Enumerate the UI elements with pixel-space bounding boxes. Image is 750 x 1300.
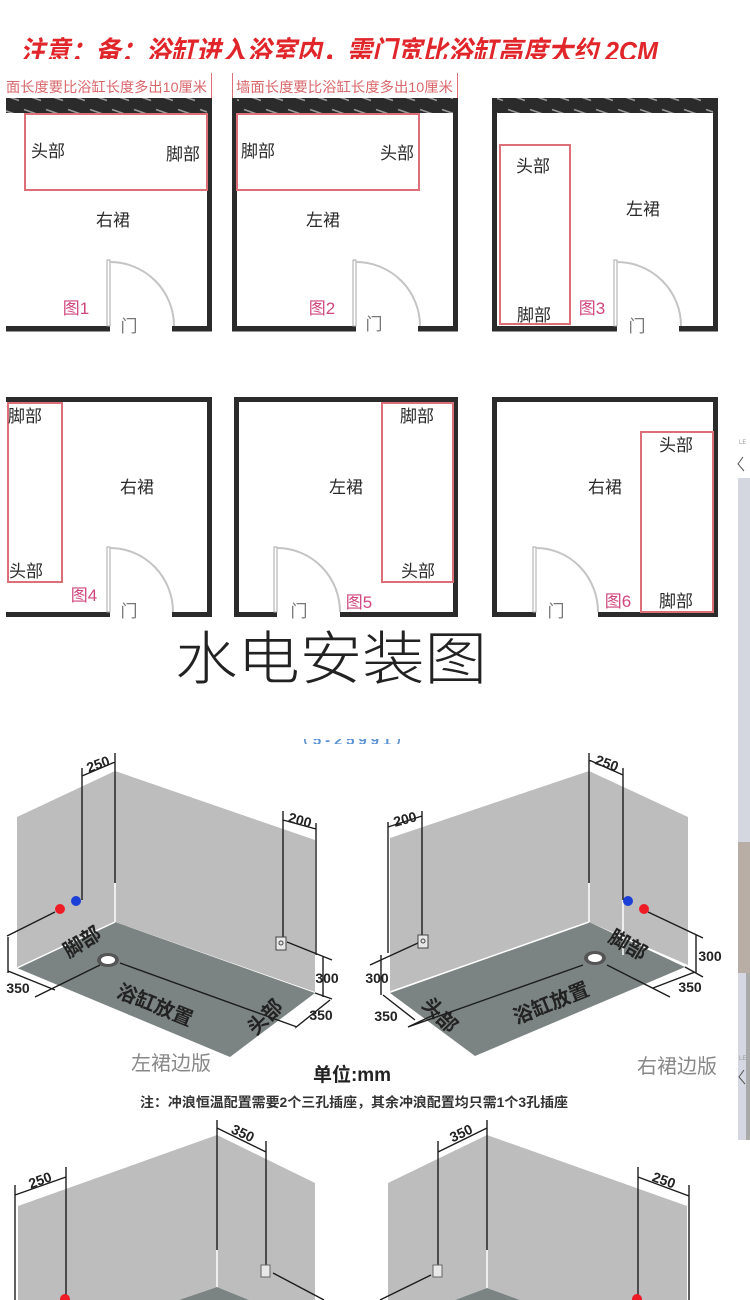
dimension lines — [380, 1120, 689, 1300]
floor plan 2: 头部 — [380, 144, 414, 163]
socket — [276, 937, 286, 950]
installation note: 注：冲浪恒温配置需要2个三孔插座，其余冲浪配置均只需1个3孔插座 — [140, 1094, 569, 1110]
floor labels: 脚部 — [59, 922, 105, 963]
floor plan 1: 右裙 — [96, 211, 130, 230]
floor plan 1: 门 — [120, 317, 138, 336]
floor — [179, 1287, 249, 1300]
neighbouring image strip at right edge — [738, 440, 750, 1140]
floor plan 2: 脚部 — [241, 142, 275, 161]
neighbouring image strip at right edge: LE — [739, 440, 746, 446]
wall length note: 墙面长度要比浴缸长度多出10厘米 — [236, 79, 453, 95]
dimension values: 250 — [84, 752, 112, 776]
diagram: left skirt version: 350 — [6, 980, 30, 996]
diagram: lower left: 250 — [26, 1168, 54, 1192]
diagram: lower right — [380, 1120, 689, 1300]
floor plan 1 — [6, 73, 212, 336]
floor plan 5: 门 — [290, 602, 308, 621]
socket — [433, 1265, 442, 1277]
section heading: 水电安装图 — [175, 627, 487, 692]
floor plan 5: 脚部 — [400, 407, 434, 426]
diagram: right skirt version: 浴缸放置 — [509, 977, 593, 1029]
diagram: right skirt version: 300 — [365, 970, 389, 986]
diagram: left skirt version: 浴缸放置 — [113, 979, 197, 1031]
drain — [97, 953, 119, 967]
floor plan 3: 头部 — [516, 157, 550, 176]
floor plan 6: 门 — [548, 602, 564, 621]
socket — [418, 935, 428, 948]
walls — [388, 1135, 487, 1300]
clipped blue caption remnant: （5-25991） — [294, 732, 410, 749]
drain — [584, 951, 606, 965]
floor plan 4 — [6, 397, 212, 621]
diagram: right skirt version: 300 — [698, 948, 722, 964]
version label: 右裙边版 — [637, 1055, 717, 1078]
hot water point — [632, 1294, 642, 1300]
walls — [390, 771, 589, 992]
diagram: left skirt version: 200 — [287, 809, 314, 831]
dimension values: 250 — [593, 751, 621, 775]
dimension values: 350 — [447, 1121, 475, 1145]
floor — [17, 922, 315, 1057]
dimension lines — [370, 753, 703, 1027]
dimension lines — [15, 1120, 324, 1300]
diagram: lower left — [15, 1120, 324, 1300]
neighbouring image strip at right edge: LE — [739, 1056, 746, 1062]
floor plan 5: 头部 — [401, 562, 435, 581]
diagram: left skirt version: 350 — [309, 1007, 333, 1023]
diagram: left skirt version: 300 — [315, 970, 339, 986]
floor plan 1: 图1 — [63, 299, 89, 318]
diagram: left skirt version — [6, 752, 339, 1075]
floor plan 4: 右裙 — [120, 478, 154, 497]
floor — [390, 922, 685, 1056]
floor plan 5: 图5 — [346, 593, 372, 612]
floor plan 4: 图4 — [71, 586, 97, 605]
floor plan 2: 图2 — [309, 299, 335, 318]
floor plan 2 — [232, 73, 458, 334]
floor plan 2: 左裙 — [306, 211, 340, 230]
floor plan 3 — [492, 98, 718, 336]
dimension values: 350 — [229, 1121, 257, 1145]
version label: 左裙边版 — [131, 1052, 211, 1075]
floor plan 1: 脚部 — [166, 145, 200, 164]
floor — [455, 1288, 520, 1300]
floor plan 4: 头部 — [9, 562, 43, 581]
floor plan 6: 头部 — [659, 436, 693, 455]
diagram: right skirt version: 350 — [678, 979, 702, 995]
hot and cold water points — [55, 904, 65, 914]
hot water point — [60, 1294, 70, 1300]
diagram: right skirt version: 头部 — [417, 993, 462, 1038]
notice title: 注意：备：浴缸进入浴室内，需门宽比浴缸高度大约 2CM — [20, 36, 659, 67]
floor plan 2: 门 — [366, 315, 382, 334]
dimension lines — [7, 753, 332, 1028]
diagram: left skirt version: 头部 — [243, 995, 288, 1040]
floor plan 6: 脚部 — [659, 592, 693, 611]
unit label: 单位:mm — [313, 1063, 391, 1086]
socket — [261, 1265, 270, 1277]
floor plan 1: 头部 — [31, 142, 65, 161]
walls — [17, 771, 115, 968]
floor plan 3: 脚部 — [517, 306, 551, 325]
floor plan 5 — [234, 397, 458, 621]
floor labels: 脚部 — [605, 925, 651, 965]
floor plan 6: 右裙 — [588, 478, 622, 497]
diagram: right skirt version — [365, 751, 722, 1078]
floor plan 6 — [492, 397, 718, 621]
wall length note: 面长度要比浴缸长度多出10厘米 — [6, 79, 207, 95]
floor plan 3: 左裙 — [626, 200, 660, 219]
clipped blue caption remnant — [280, 725, 430, 752]
diagram: right skirt version: 350 — [374, 1008, 398, 1024]
floor plan 4: 门 — [120, 602, 138, 621]
floor plan 3: 图3 — [579, 299, 605, 318]
floor plan 3: 门 — [628, 317, 646, 336]
floor plan 4: 脚部 — [8, 407, 42, 426]
floor plan 6: 图6 — [605, 592, 631, 611]
diagram: lower right: 250 — [650, 1168, 678, 1192]
hot and cold water points — [623, 896, 633, 906]
floor plan 5: 左裙 — [329, 478, 363, 497]
diagram: right skirt version: 200 — [392, 808, 419, 830]
walls — [18, 1135, 217, 1300]
